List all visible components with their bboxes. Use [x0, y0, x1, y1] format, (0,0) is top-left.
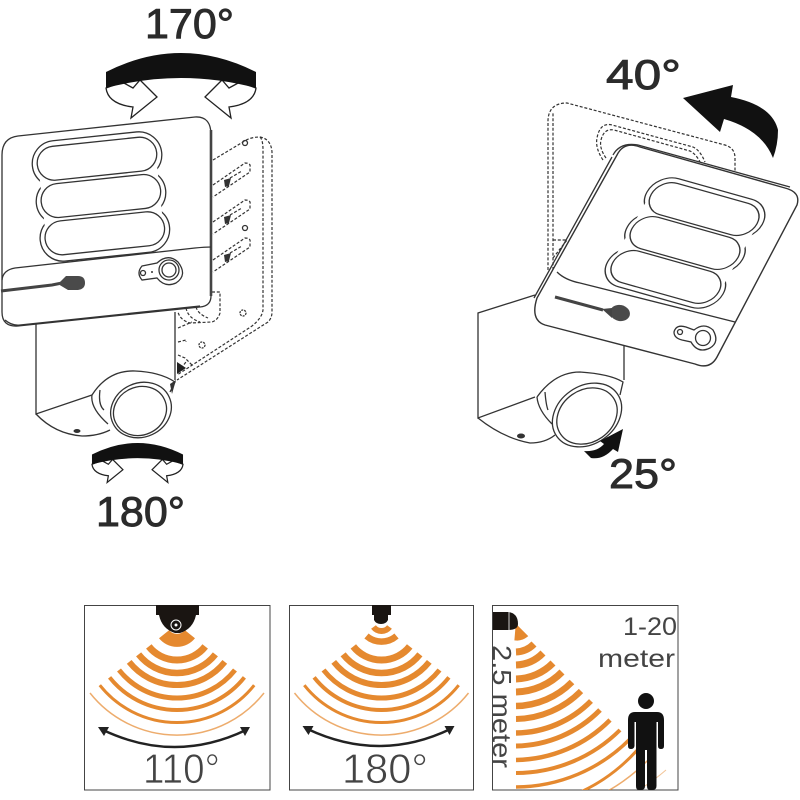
- panel: detection range side view: [487, 606, 678, 800]
- camera dome and lens: [537, 370, 634, 460]
- dashed original position outline: [548, 103, 735, 270]
- right device: tilted view: [478, 103, 798, 460]
- rotation arrow: 170 degrees: [106, 53, 256, 118]
- icon: person: [628, 693, 664, 790]
- camera dome and lens: [92, 371, 181, 448]
- label: 2.5 meter: 2.5 meter: [487, 645, 517, 768]
- panel: 180 degree view: [290, 605, 474, 792]
- left device: front view with camera: [1, 117, 272, 448]
- small camera lens: [674, 326, 716, 350]
- bullet camera icon: [372, 605, 391, 624]
- side-view camera icon: [493, 612, 518, 630]
- tilted lamp panel housing: [534, 144, 798, 366]
- microphone and small camera lens: [139, 258, 183, 285]
- motion sensor strip: [1, 276, 85, 291]
- label: 180 degrees: 180°: [96, 488, 185, 535]
- back plate dashed outline: [177, 137, 272, 380]
- three LED light windows: [30, 130, 172, 263]
- motion sensor strip: [555, 297, 631, 323]
- label: meter: meter: [598, 645, 675, 673]
- dome camera icon: [156, 605, 199, 633]
- tilt arrow: 25 degrees: [584, 429, 623, 458]
- label: 1-20: 1-20: [623, 613, 677, 641]
- rotation arrow: 180 degrees: [92, 443, 183, 482]
- label: 40 degrees: 40°: [606, 51, 681, 98]
- sweep arrow: [98, 727, 250, 747]
- lamp panel housing: [2, 117, 211, 326]
- orange detection arcs: [90, 634, 264, 735]
- sweep arrow: [302, 726, 454, 746]
- label: 110 degrees: 110°: [143, 745, 220, 792]
- label: 170 degrees: 170°: [145, 0, 234, 47]
- tilt arrow: 40 degrees: [683, 85, 778, 158]
- side-view orange detection arcs: [514, 626, 666, 790]
- orange detection arcs: [294, 627, 468, 735]
- three LED light windows: [597, 173, 773, 313]
- lower camera body: [36, 312, 175, 436]
- panel: 110 degree view: [84, 605, 270, 792]
- label: 180 degrees field of view: 180°: [342, 745, 428, 792]
- lower camera body: [478, 295, 624, 443]
- label: 25 degrees: 25°: [609, 450, 677, 497]
